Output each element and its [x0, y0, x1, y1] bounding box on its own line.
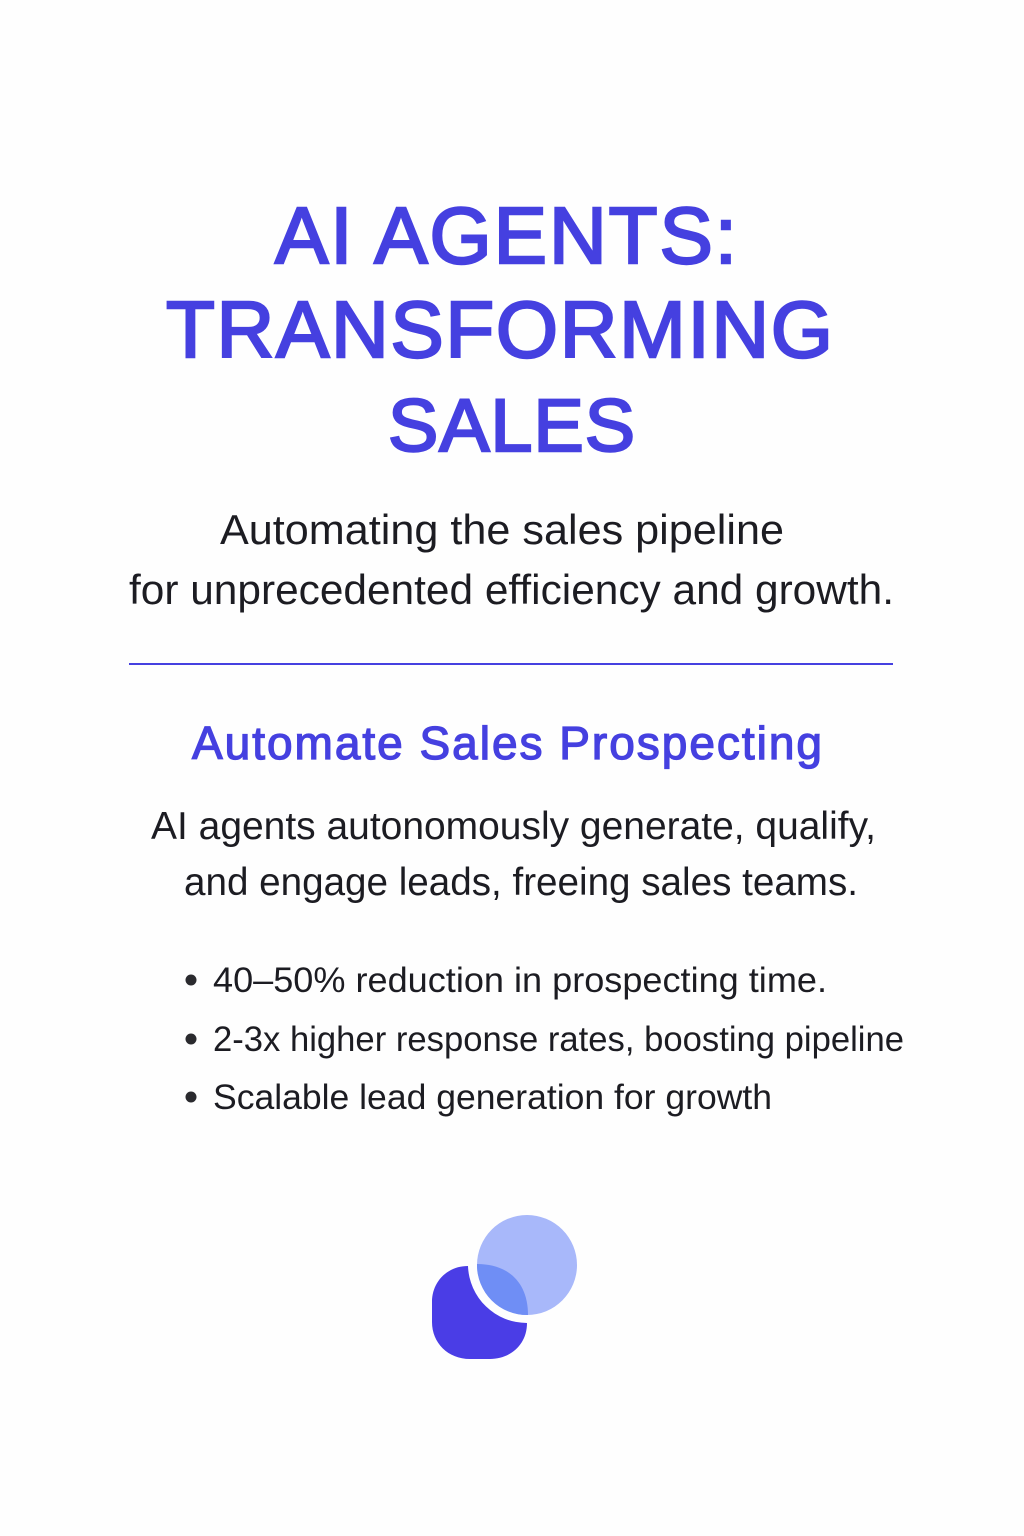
title: AI AGENTS: — [275, 191, 737, 280]
title: TRANSFORMING — [166, 285, 833, 374]
section heading: Automate Sales Prospecting — [192, 717, 822, 769]
bullet list — [186, 961, 904, 1117]
subtitle: Automating the sales pipeline — [220, 506, 784, 553]
section description: and engage leads, freeing sales teams. — [184, 861, 858, 904]
section description — [151, 805, 876, 904]
subtitle — [129, 506, 894, 613]
bullet: response rates: 2-3x higher response rates, boosting pipeline — [213, 1020, 904, 1059]
section description: AI agents autonomously generate, qualify, — [151, 805, 876, 848]
bullet: lead generation: Scalable lead generation for growth — [213, 1078, 772, 1117]
title — [166, 191, 833, 467]
title: SALES — [388, 384, 636, 467]
subtitle: for unprecedented efficiency and growth. — [129, 566, 894, 613]
icon: overlapping logo — [432, 1215, 577, 1359]
bullet: prospecting time: 40–50% reduction in prospecting time. — [213, 961, 827, 1000]
